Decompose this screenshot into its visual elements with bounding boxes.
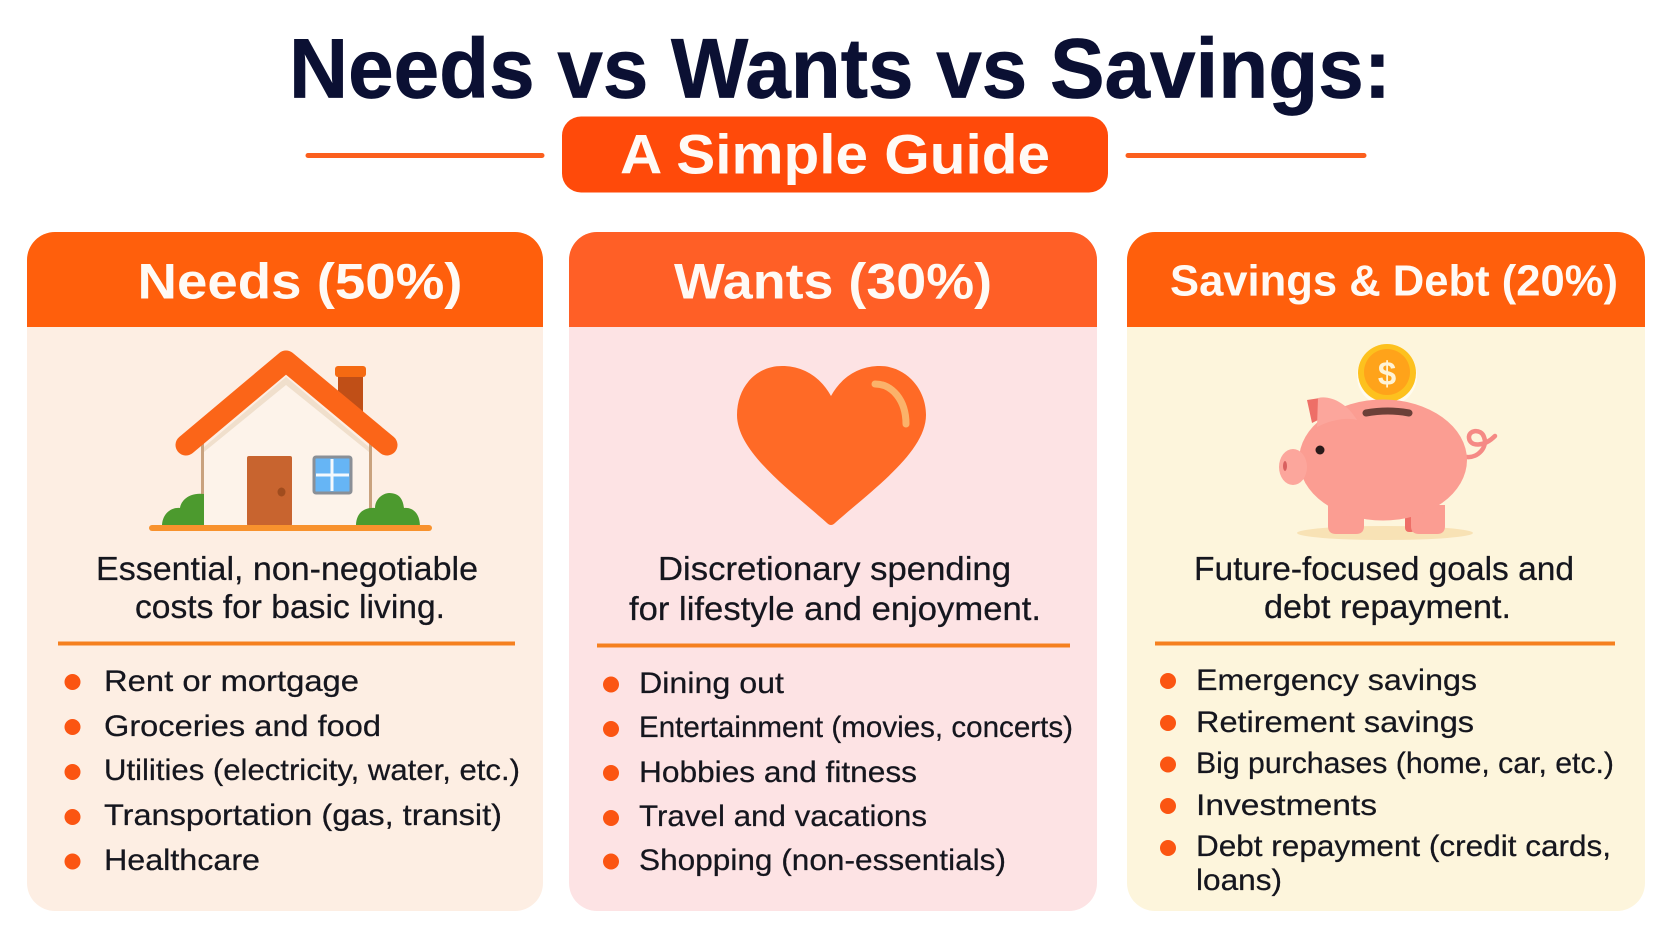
description: savings: debt repayment. — [1264, 588, 1511, 625]
icon: house — [149, 361, 432, 531]
list: needs: Groceries and food — [104, 710, 381, 743]
list: wants: Entertainment (movies, concerts) — [639, 711, 1073, 744]
list: savings — [1160, 664, 1614, 897]
header: wants: Wants (30%) — [674, 254, 992, 310]
description: needs — [96, 550, 478, 625]
card background: wants — [569, 232, 1097, 911]
list: wants — [603, 667, 1073, 877]
panel: needs — [27, 232, 543, 911]
list: wants: Travel and vacations — [639, 800, 927, 833]
panel: savings and debt — [1127, 232, 1645, 911]
list: savings: Debt repayment (credit cards, — [1196, 830, 1611, 863]
list: needs: Healthcare — [104, 844, 260, 877]
card background: needs — [27, 232, 543, 911]
header: needs — [27, 232, 543, 327]
list: needs: Rent or mortgage — [104, 665, 359, 698]
list: savings: loans) — [1196, 864, 1282, 897]
panel: wants — [569, 232, 1097, 911]
list: needs: Utilities (electricity, water, etc.) — [104, 754, 520, 787]
header: wants — [569, 232, 1097, 327]
description: wants — [629, 550, 1041, 627]
list: wants: Dining out — [639, 667, 785, 700]
header: savings — [1127, 232, 1645, 327]
description: needs: costs for basic living. — [135, 588, 445, 625]
list: needs — [64, 665, 520, 877]
description: needs: Essential, non-negotiable — [96, 550, 478, 587]
description: savings — [1194, 550, 1574, 625]
card background: savings — [1127, 232, 1645, 911]
list: savings: Retirement savings — [1196, 706, 1474, 739]
description: wants: for lifestyle and enjoyment. — [629, 590, 1041, 627]
icon: heart — [737, 366, 926, 525]
list: savings: Investments — [1196, 789, 1377, 822]
header: savings: Savings & Debt (20%) — [1170, 256, 1618, 306]
list: needs: Transportation (gas, transit) — [104, 799, 502, 832]
icon: piggy bank — [1279, 344, 1495, 540]
subtitle banner — [308, 116, 1364, 192]
title: Needs vs Wants vs Savings: — [289, 22, 1391, 116]
list: savings: Big purchases (home, car, etc.) — [1196, 747, 1614, 780]
subtitle banner: A Simple Guide — [620, 122, 1050, 186]
icon: piggy bank: $ — [1378, 355, 1396, 392]
list: wants: Shopping (non-essentials) — [639, 844, 1006, 877]
list: wants: Hobbies and fitness — [639, 756, 917, 789]
header: needs: Needs (50%) — [138, 254, 462, 310]
description: wants: Discretionary spending — [658, 550, 1011, 587]
description: savings: Future-focused goals and — [1194, 550, 1574, 587]
list: savings: Emergency savings — [1196, 664, 1477, 697]
